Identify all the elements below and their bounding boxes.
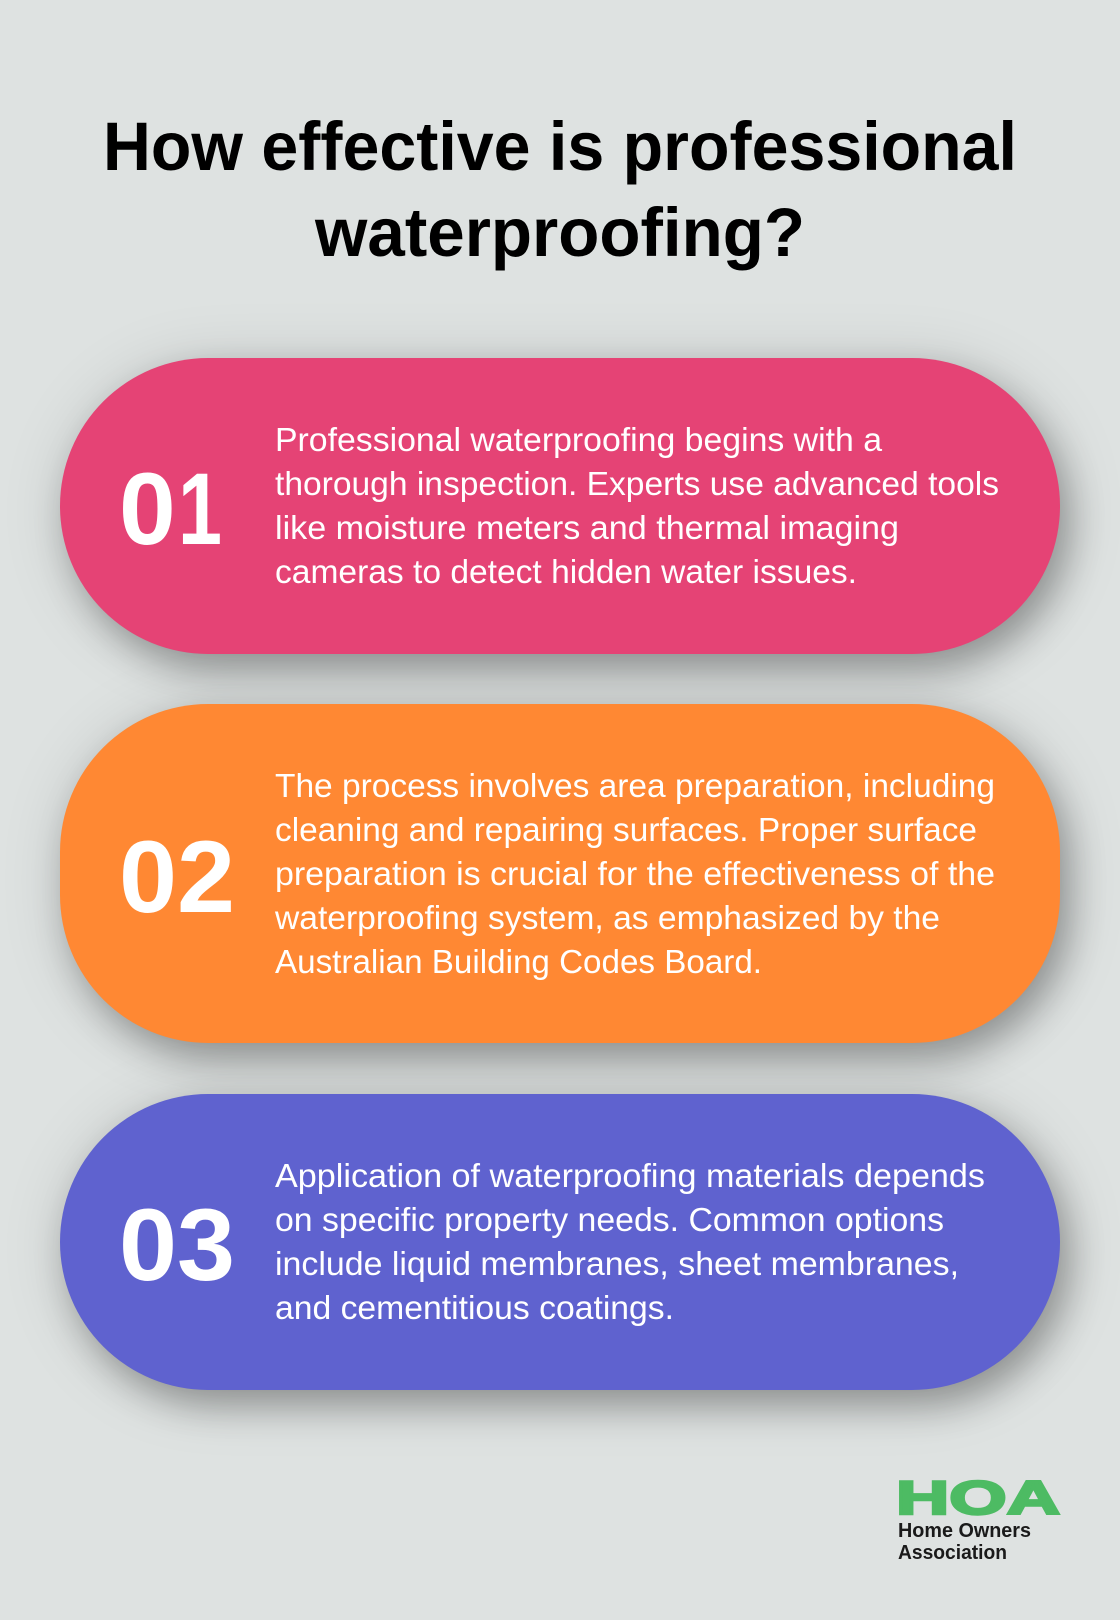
number 03: 03	[119, 1188, 235, 1302]
text block 03: Application of waterproofing materials depends	[275, 1158, 985, 1195]
number 01: 0	[119, 452, 176, 566]
logo wordmark: Association	[898, 1542, 1007, 1564]
panel: step 01	[60, 358, 1060, 654]
pill background 01	[60, 358, 1060, 654]
title	[103, 108, 1017, 271]
text block 01: thorough inspection. Experts use advanced tools	[275, 466, 999, 503]
text block 03	[275, 1158, 985, 1327]
number 01: 1	[178, 452, 222, 566]
pill background 03	[60, 1094, 1060, 1390]
title: waterproofing?	[314, 194, 805, 271]
text block 03: include liquid membranes, sheet membranes,	[275, 1246, 959, 1283]
text block 03: on specific property needs. Common options	[275, 1202, 944, 1239]
panel: step 03	[60, 1094, 1060, 1390]
text block 01	[275, 422, 999, 591]
text block 03: and cementitious coatings.	[275, 1290, 674, 1327]
text block 01: Professional waterproofing begins with a	[275, 422, 882, 459]
text block 01: like moisture meters and thermal imaging	[275, 510, 899, 547]
pill background 02	[60, 704, 1060, 1043]
text block 02: waterproofing system, as emphasized by the	[274, 900, 940, 937]
panel: step 02	[60, 704, 1060, 1043]
text block 02: The process involves area preparation, including	[275, 768, 995, 805]
text block 02: Australian Building Codes Board.	[275, 944, 762, 981]
logo mark HOA: HOA	[896, 1471, 1060, 1524]
text block 02: cleaning and repairing surfaces. Proper surface	[275, 812, 977, 849]
text block 02	[274, 768, 995, 981]
logo wordmark	[898, 1520, 1031, 1564]
text block 02: preparation is crucial for the effectiveness of the	[275, 856, 995, 893]
logo wordmark: Home Owners	[898, 1520, 1031, 1542]
logo: HOA Home Owners Association	[896, 1471, 1060, 1564]
text block 01: cameras to detect hidden water issues.	[275, 554, 857, 591]
title: How effective is professional	[103, 108, 1017, 185]
number 02: 02	[119, 820, 235, 934]
